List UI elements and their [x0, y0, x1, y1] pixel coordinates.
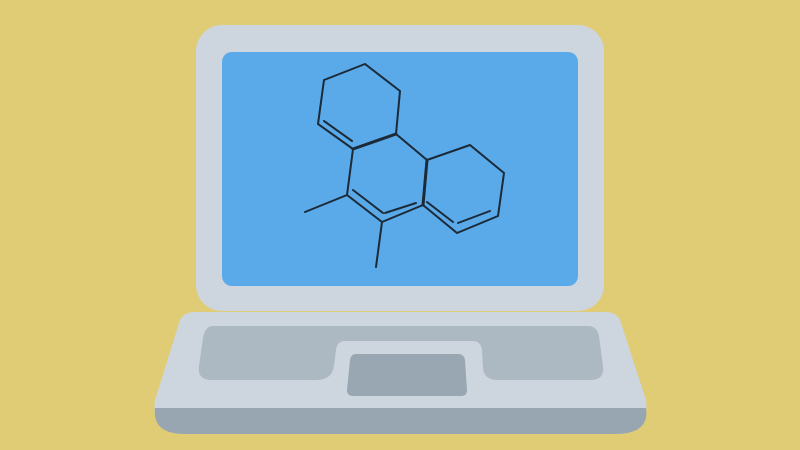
screen	[222, 52, 578, 286]
keyboard panel	[199, 326, 603, 380]
laptop screen bezel	[196, 25, 604, 311]
trackpad	[347, 354, 467, 396]
laptop base	[154, 312, 646, 434]
molecule	[305, 64, 504, 267]
